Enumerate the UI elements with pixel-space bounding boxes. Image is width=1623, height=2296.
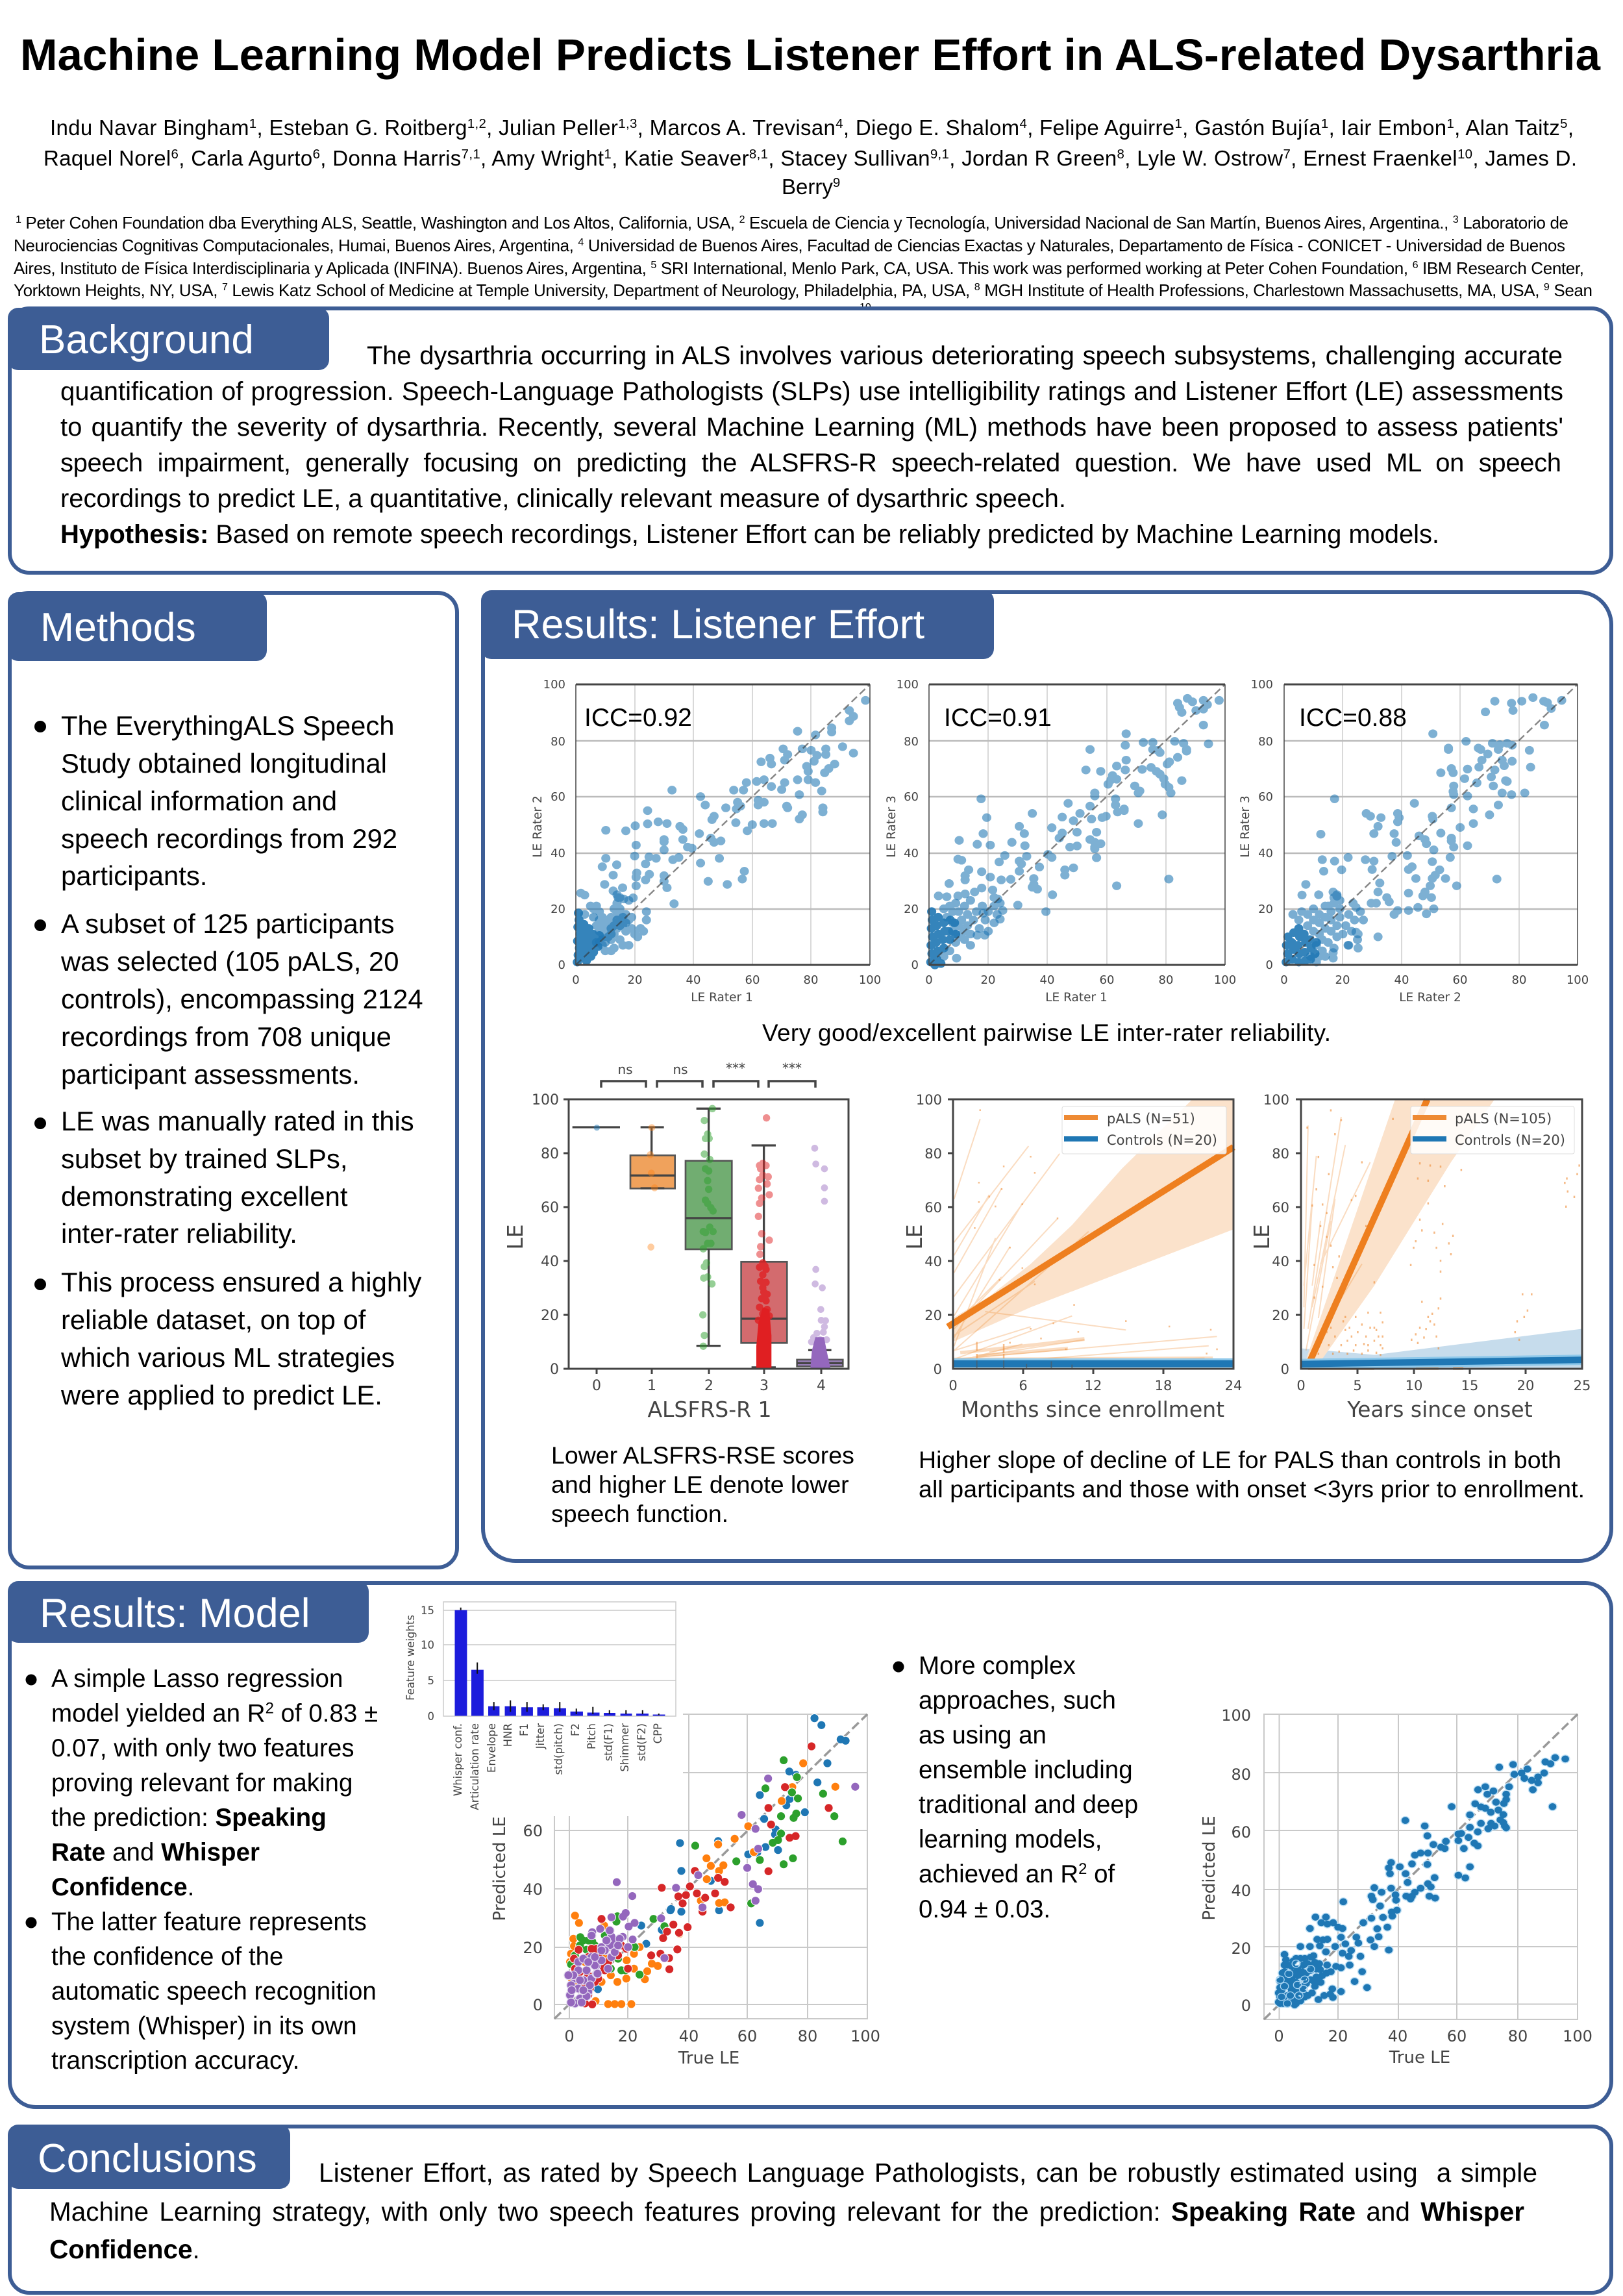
scatter: rater 2 vs rater 3 [1239, 678, 1589, 1004]
methods list: inter-rater reliability. [61, 1218, 297, 1249]
heading: methods: Methods [40, 605, 196, 650]
ensemble findings list: achieved an R2 of [919, 1860, 1115, 1888]
ensemble findings list: More complex [919, 1652, 1076, 1680]
scatter: rater 2 vs rater 3: ICC=0.88 [1299, 704, 1407, 732]
line chart: LE vs years since onset: 20 [1517, 1378, 1534, 1393]
scatter: rater 2 vs rater 3: 40 [1394, 973, 1409, 987]
panel: background [8, 308, 1611, 573]
significance brackets: ns [617, 1062, 633, 1077]
authors: Berry9 [782, 175, 840, 199]
affiliations: Yorktown Heights, NY, USA, 7 Lewis Katz School of Medicine at Temple University, Department of Neurology, Philadelphia, PA, USA, 8 MGH Institute of Health Professions, Charlestown Massachusetts, MA, USA, 9 Sean [14, 281, 1592, 300]
bar chart: feature weights: std(pitch) [552, 1723, 565, 1775]
panel: methods [8, 592, 457, 1567]
scatter: rater 2 vs rater 3: LE Rater 2 [1399, 991, 1461, 1004]
scatter: rater 1 vs rater 2: 40 [551, 847, 565, 860]
heading: results listener effort: Results: Listener Effort [512, 602, 925, 647]
scatter: rater 2 vs rater 3: 100 [1251, 678, 1273, 692]
scatter: rater 2 vs rater 3: 20 [1335, 973, 1350, 987]
line chart: LE vs months since enrollment: LE [902, 1224, 927, 1250]
legend: pALS (N=105) [1455, 1111, 1552, 1127]
bar chart: feature weights: std(F1) [602, 1723, 615, 1761]
bar chart: feature weights: Pitch [586, 1723, 598, 1749]
scatter: lasso predicted vs true LE: 60 [737, 2027, 757, 2045]
box plot: LE by ALSFRS-R 1: 80 [541, 1146, 559, 1162]
panel: conclusions [8, 2125, 1611, 2293]
line chart: LE vs years since onset: 5 [1353, 1378, 1362, 1393]
scatter: rater 1 vs rater 2: LE Rater 1 [691, 991, 753, 1004]
scatter: rater 2 vs rater 3: 80 [1258, 735, 1273, 749]
ensemble findings list: approaches, such [919, 1687, 1116, 1714]
background text: to quantify the severity of dysarthria. Recently, several Machine Learning (ML) methods have been proposed to assess patients' [60, 413, 1563, 442]
scatter: rater 1 vs rater 3 [885, 678, 1236, 1004]
scatter: ensemble predicted vs true LE: 100 [1221, 1706, 1251, 1725]
line chart: LE vs months since enrollment [902, 1092, 1242, 1422]
authors: Indu Navar Bingham1, Esteban G. Roitberg1,2, Julian Peller1,3, Marcos A. Trevisan4, Diego E. Shalom4, Felipe Aguirre1, Gastón Bujía1, Iair Embon1, Alan Taitz5, [50, 116, 1574, 140]
bar chart: feature weights: HNR [502, 1723, 514, 1747]
line chart: LE vs years since onset: 10 [1406, 1378, 1422, 1393]
heading: conclusions [8, 2125, 290, 2189]
scatter: rater 1 vs rater 2: 100 [543, 678, 565, 692]
model findings list: Rate and Whisper [51, 1839, 260, 1866]
affiliations: Aires, Instituto de Física Interdisciplinaria y Aplicada (INFINA). Buenos Aires, Argentina, 5 SRI International, Menlo Park, CA, USA. This work was performed working at Peter Cohen Foundation, 6 IBM Research Center, [14, 258, 1584, 278]
methods list: A subset of 125 participants [61, 908, 395, 939]
model findings list: system (Whisper) in its own [51, 2012, 357, 2040]
scatter: lasso predicted vs true LE: 20 [523, 1939, 543, 1957]
line chart: LE vs months since enrollment: 80 [924, 1146, 942, 1162]
scatter: ensemble predicted vs true LE: 80 [1231, 1766, 1251, 1784]
affiliations: Neurociencias Cognitivas Computacionales, Humai, Buenos Aires, Argentina, 4 Universidad de Buenos Aires, Facultad de Ciencias Exactas y Naturales, Departamento de Física - CONICET - Universidad de Buenos [14, 236, 1565, 255]
caption: box plot: Lower ALSFRS-RSE scores [551, 1441, 854, 1469]
methods list: recordings from 708 unique [61, 1021, 391, 1052]
scatter: rater 1 vs rater 2: 40 [686, 973, 700, 987]
scatter: rater 1 vs rater 2 [531, 678, 881, 1004]
bar chart: feature weights: Articulation rate [469, 1723, 481, 1810]
caption: box plot: speech function. [551, 1500, 728, 1527]
line chart: LE vs years since onset: 40 [1272, 1254, 1289, 1269]
bar chart: feature weights: std(F2) [636, 1723, 648, 1761]
background text: Hypothesis: Based on remote speech recordings, Listener Effort can be reliably predicted by Machine Learning models. [60, 520, 1439, 549]
scatter: rater 2 vs rater 3: 20 [1258, 903, 1273, 916]
caption: inter-rater reliability: Very good/excellent pairwise LE inter-rater reliability. [762, 1019, 1331, 1046]
scatter: ensemble predicted vs true LE: 60 [1447, 2027, 1467, 2045]
box plot: LE by ALSFRS-R 1: 20 [541, 1308, 559, 1324]
line chart: LE vs years since onset: LE [1249, 1224, 1274, 1250]
box plot: LE by ALSFRS-R 1: 4 [817, 1378, 826, 1394]
scatter: rater 2 vs rater 3: 40 [1258, 847, 1273, 860]
box plot: LE by ALSFRS-R 1: ALSFRS-R 1 [647, 1397, 772, 1422]
heading: methods [8, 592, 267, 661]
panel: results listener effort [481, 590, 1611, 1561]
box plot: LE by ALSFRS-R 1: LE [502, 1224, 528, 1250]
caption: slope of decline: Higher slope of decline of LE for PALS than controls in both [919, 1446, 1561, 1473]
scatter: rater 1 vs rater 2: 60 [745, 973, 760, 987]
scatter: rater 1 vs rater 3: LE Rater 3 [885, 795, 898, 858]
box plot: LE by ALSFRS-R 1: 40 [541, 1254, 559, 1270]
model findings list: the confidence of the [51, 1943, 283, 1971]
scatter: rater 1 vs rater 3: 40 [1040, 973, 1054, 987]
scatter: rater 2 vs rater 3: 0 [1280, 973, 1288, 987]
scatter: lasso predicted vs true LE: True LE [678, 2049, 739, 2068]
line chart: LE vs years since onset: 15 [1461, 1378, 1478, 1393]
significance brackets: *** [782, 1060, 802, 1076]
model findings list: automatic speech recognition [51, 1978, 377, 2005]
bar chart: feature weights [404, 1602, 676, 1810]
scatter: ensemble predicted vs true LE: 80 [1508, 2027, 1528, 2045]
bar chart: feature weights: Feature weights [404, 1615, 417, 1701]
scatter: rater 1 vs rater 3: 20 [904, 903, 919, 916]
scatter: lasso predicted vs true LE [490, 1714, 880, 2068]
line chart: LE vs months since enrollment: 24 [1225, 1378, 1242, 1393]
scatter: rater 1 vs rater 3: 80 [904, 735, 919, 749]
line chart: LE vs months since enrollment: 0 [948, 1378, 958, 1393]
box plot: LE by ALSFRS-R 1: 0 [592, 1378, 601, 1394]
scatter: lasso predicted vs true LE: 80 [798, 2027, 817, 2045]
conclusions text [49, 2158, 1537, 2264]
legend [1062, 1106, 1226, 1154]
scatter: lasso predicted vs true LE: Predicted LE [490, 1816, 510, 1921]
scatter: rater 1 vs rater 2: 100 [859, 973, 881, 987]
authors: Raquel Norel6, Carla Agurto6, Donna Harris7,1, Amy Wright1, Katie Seaver8,1, Stacey Sullivan9,1, Jordan R Green8, Lyle W. Ostrow7, Ernest Fraenkel10, James D. [43, 146, 1577, 170]
ensemble findings list: traditional and deep [919, 1791, 1138, 1819]
bar chart: feature weights: 5 [427, 1675, 434, 1687]
scatter: ensemble predicted vs true LE [1200, 1706, 1592, 2067]
scatter: rater 2 vs rater 3: 100 [1567, 973, 1589, 987]
methods list: speech recordings from 292 [61, 823, 397, 854]
scatter: ensemble predicted vs true LE: 20 [1231, 1940, 1251, 1958]
model findings list [26, 1665, 378, 2075]
methods list: This process ensured a highly [61, 1267, 421, 1297]
heading: results model: Results: Model [40, 1591, 310, 1636]
legend [1411, 1106, 1574, 1154]
ensemble findings list: 0.94 ± 0.03. [919, 1895, 1050, 1923]
ensemble findings list: ensemble including [919, 1756, 1133, 1784]
methods list: which various ML strategies [60, 1342, 395, 1373]
scatter: rater 2 vs rater 3: 60 [1453, 973, 1467, 987]
scatter: ensemble predicted vs true LE: 0 [1241, 1997, 1251, 2015]
scatter: rater 1 vs rater 2: LE Rater 2 [531, 795, 545, 858]
significance brackets [601, 1060, 815, 1088]
bar chart: feature weights: Shimmer [619, 1723, 631, 1772]
scatter: lasso predicted vs true LE: 0 [533, 1996, 543, 2014]
caption: slope of decline: all participants and those with onset <3yrs prior to enrollment. [919, 1475, 1585, 1503]
heading: results listener effort [481, 590, 994, 659]
bar chart: feature weights: F1 [518, 1723, 530, 1736]
scatter: rater 1 vs rater 3: 80 [1159, 973, 1173, 987]
methods list: LE was manually rated in this [61, 1106, 414, 1136]
line chart: LE vs months since enrollment: 40 [924, 1254, 942, 1269]
model findings list: proving relevant for making [51, 1769, 353, 1797]
line chart: LE vs months since enrollment: 0 [934, 1362, 942, 1377]
methods list: was selected (105 pALS, 20 [60, 946, 399, 977]
caption: box plot: and higher LE denote lower [551, 1471, 849, 1498]
model findings list: transcription accuracy. [51, 2047, 299, 2075]
line chart: LE vs years since onset: 80 [1272, 1146, 1289, 1162]
scatter: rater 1 vs rater 3: 100 [1214, 973, 1236, 987]
scatter: rater 1 vs rater 3: 40 [904, 847, 919, 860]
conclusions text: Machine Learning strategy, with only two speech features proving relevant for the prediction: Speaking Rate and Whisper [49, 2197, 1524, 2227]
legend: pALS (N=51) [1107, 1111, 1195, 1127]
panel: results model [8, 1581, 1611, 2107]
methods list: demonstrating excellent [61, 1181, 348, 1212]
scatter: rater 1 vs rater 2: 20 [551, 903, 565, 916]
box plot: LE by ALSFRS-R 1: 2 [704, 1378, 713, 1394]
box plot: LE by ALSFRS-R 1: 60 [541, 1200, 559, 1216]
line chart: LE vs months since enrollment: Months since enrollment [961, 1397, 1224, 1422]
conclusions text: Listener Effort, as rated by Speech Language Pathologists, can be robustly estimated using a simple [319, 2158, 1537, 2188]
line chart: LE vs years since onset: 60 [1272, 1200, 1289, 1216]
scatter: ensemble predicted vs true LE: True LE [1389, 2048, 1450, 2067]
scatter: lasso predicted vs true LE: 40 [679, 2027, 699, 2045]
legend: Controls (N=20) [1455, 1132, 1565, 1148]
scatter: rater 1 vs rater 3: 100 [897, 678, 919, 692]
background text: quantification of progression. Speech-Language Pathologists (SLPs) use intelligibility ratings and Listener Effort (LE) assessments [60, 377, 1563, 406]
scatter: ensemble predicted vs true LE: Predicted LE [1200, 1816, 1219, 1921]
significance brackets: *** [726, 1060, 745, 1076]
significance brackets: ns [673, 1062, 688, 1077]
legend: Controls (N=20) [1107, 1132, 1217, 1148]
bar chart: feature weights: 10 [421, 1639, 434, 1651]
bar chart: feature weights: Jitter [534, 1723, 547, 1749]
scatter: lasso predicted vs true LE: 40 [523, 1880, 543, 1899]
bar chart: feature weights: 15 [421, 1604, 434, 1617]
scatter: rater 1 vs rater 2: 0 [558, 958, 565, 972]
scatter: rater 2 vs rater 3: 60 [1258, 790, 1273, 804]
methods list: participants. [61, 860, 207, 891]
bar chart: feature weights: 0 [427, 1710, 434, 1723]
line chart: LE vs years since onset: Years since onset [1346, 1397, 1533, 1422]
line chart: LE vs years since onset [1249, 1092, 1591, 1422]
scatter: rater 1 vs rater 3: 20 [981, 973, 995, 987]
methods list: reliable dataset, on top of [61, 1304, 366, 1335]
scatter: ensemble predicted vs true LE: 40 [1231, 1882, 1251, 1900]
line chart: LE vs months since enrollment: 18 [1155, 1378, 1172, 1393]
line chart: LE vs years since onset: 0 [1281, 1362, 1289, 1377]
ensemble findings list: learning models, [919, 1826, 1102, 1853]
model findings list: The latter feature represents [51, 1908, 367, 1936]
line chart: LE vs years since onset: 20 [1272, 1308, 1289, 1323]
bar chart: feature weights: Envelope [486, 1723, 498, 1773]
line chart: LE vs months since enrollment: 20 [924, 1308, 942, 1323]
scatter: rater 1 vs rater 3: 60 [1100, 973, 1114, 987]
bar chart: feature weights: Whisper conf. [452, 1723, 464, 1796]
scatter: rater 1 vs rater 3: ICC=0.91 [944, 704, 1052, 732]
background text: The dysarthria occurring in ALS involves various deteriorating speech subsystems, challenging accurate [367, 342, 1563, 370]
caption: slope of decline [919, 1446, 1585, 1503]
line chart: LE vs years since onset: 0 [1296, 1378, 1306, 1393]
model findings list: A simple Lasso regression [51, 1665, 343, 1693]
background text [60, 342, 1563, 549]
scatter: lasso predicted vs true LE: 100 [850, 2027, 880, 2045]
methods list: participant assessments. [61, 1059, 360, 1090]
affiliations: 10 [860, 302, 871, 313]
box plot: LE by ALSFRS-R 1: 3 [760, 1378, 769, 1394]
methods list: were applied to predict LE. [60, 1380, 382, 1410]
model findings list: the prediction: Speaking [51, 1804, 327, 1832]
bar chart: feature weights: CPP [652, 1723, 664, 1743]
line chart: LE vs months since enrollment: 6 [1019, 1378, 1028, 1393]
methods list: clinical information and [61, 786, 337, 816]
background text: speech impairment, generally focusing on predicting the ALSFRS-R speech-related question. We have used ML on speech [60, 449, 1561, 477]
caption: box plot [551, 1441, 854, 1527]
scatter: lasso predicted vs true LE: 20 [618, 2027, 638, 2045]
scatter: lasso predicted vs true LE: 0 [564, 2027, 575, 2045]
scatter: rater 1 vs rater 2: ICC=0.92 [584, 704, 692, 732]
model findings list: Confidence. [51, 1873, 194, 1901]
scatter: rater 2 vs rater 3: LE Rater 3 [1239, 795, 1252, 858]
authors [43, 116, 1577, 199]
heading: conclusions: Conclusions [38, 2136, 257, 2181]
methods list: subset by trained SLPs, [61, 1143, 347, 1174]
box plot: LE by ALSFRS-R 1: 0 [550, 1362, 559, 1378]
model findings list: model yielded an R2 of 0.83 ± [51, 1699, 378, 1727]
background text: recordings to predict LE, a quantitative, clinically relevant measure of dysarthric speech. [60, 484, 1066, 513]
line chart: LE vs months since enrollment: 12 [1085, 1378, 1102, 1393]
scatter: ensemble predicted vs true LE: 60 [1231, 1823, 1251, 1841]
box plot: LE by ALSFRS-R 1: 100 [532, 1092, 559, 1108]
methods list [34, 710, 423, 1410]
line chart: LE vs months since enrollment: 100 [916, 1092, 942, 1108]
scatter: ensemble predicted vs true LE: 20 [1328, 2027, 1348, 2045]
box plot: LE by ALSFRS-R 1: 1 [647, 1378, 656, 1394]
model findings list: 0.07, with only two features [51, 1734, 354, 1762]
scatter: rater 2 vs rater 3: 0 [1266, 958, 1273, 972]
methods list: Study obtained longitudinal [61, 748, 387, 779]
conclusions text: Confidence. [49, 2234, 200, 2264]
scatter: ensemble predicted vs true LE: 100 [1563, 2027, 1592, 2045]
scatter: rater 1 vs rater 2: 0 [572, 973, 580, 987]
methods list: controls), encompassing 2124 [61, 984, 423, 1014]
scatter: rater 1 vs rater 2: 20 [628, 973, 642, 987]
ensemble findings list [893, 1652, 1138, 1923]
scatter: ensemble predicted vs true LE: 40 [1388, 2027, 1407, 2045]
affiliations [14, 213, 1592, 313]
scatter: rater 1 vs rater 3: 0 [911, 958, 919, 972]
affiliations: 1 Peter Cohen Foundation dba Everything ALS, Seattle, Washington and Los Altos, California, USA, 2 Escuela de Ciencia y Tecnología, Universidad Nacional de San Martín, Buenos Aires, Argentina., 3 Laboratorio de [16, 213, 1568, 232]
scatter: lasso predicted vs true LE: 60 [523, 1822, 543, 1840]
line chart: LE vs years since onset: 100 [1263, 1092, 1289, 1108]
line chart: LE vs years since onset: 25 [1574, 1378, 1591, 1393]
scatter: rater 1 vs rater 3: LE Rater 1 [1045, 991, 1108, 1004]
heading: background: Background [39, 318, 254, 362]
scatter: rater 1 vs rater 3: 60 [904, 790, 919, 804]
scatter: rater 1 vs rater 3: 0 [925, 973, 933, 987]
scatter: ensemble predicted vs true LE: 0 [1274, 2027, 1284, 2045]
scatter: rater 1 vs rater 2: 80 [551, 735, 565, 749]
heading: results model [8, 1581, 369, 1643]
scatter: rater 2 vs rater 3: 80 [1512, 973, 1526, 987]
methods list: The EverythingALS Speech [61, 710, 394, 741]
ensemble findings list: as using an [919, 1721, 1047, 1749]
box plot: LE by ALSFRS-R 1 [502, 1060, 849, 1422]
scatter: rater 1 vs rater 2: 80 [804, 973, 818, 987]
scatter: rater 1 vs rater 2: 60 [551, 790, 565, 804]
bar chart: feature weights: F2 [569, 1723, 582, 1736]
title: Machine Learning Model Predicts Listener Effort in ALS-related Dysarthria [20, 30, 1601, 80]
heading: background [8, 308, 329, 370]
line chart: LE vs months since enrollment: 60 [924, 1200, 942, 1216]
